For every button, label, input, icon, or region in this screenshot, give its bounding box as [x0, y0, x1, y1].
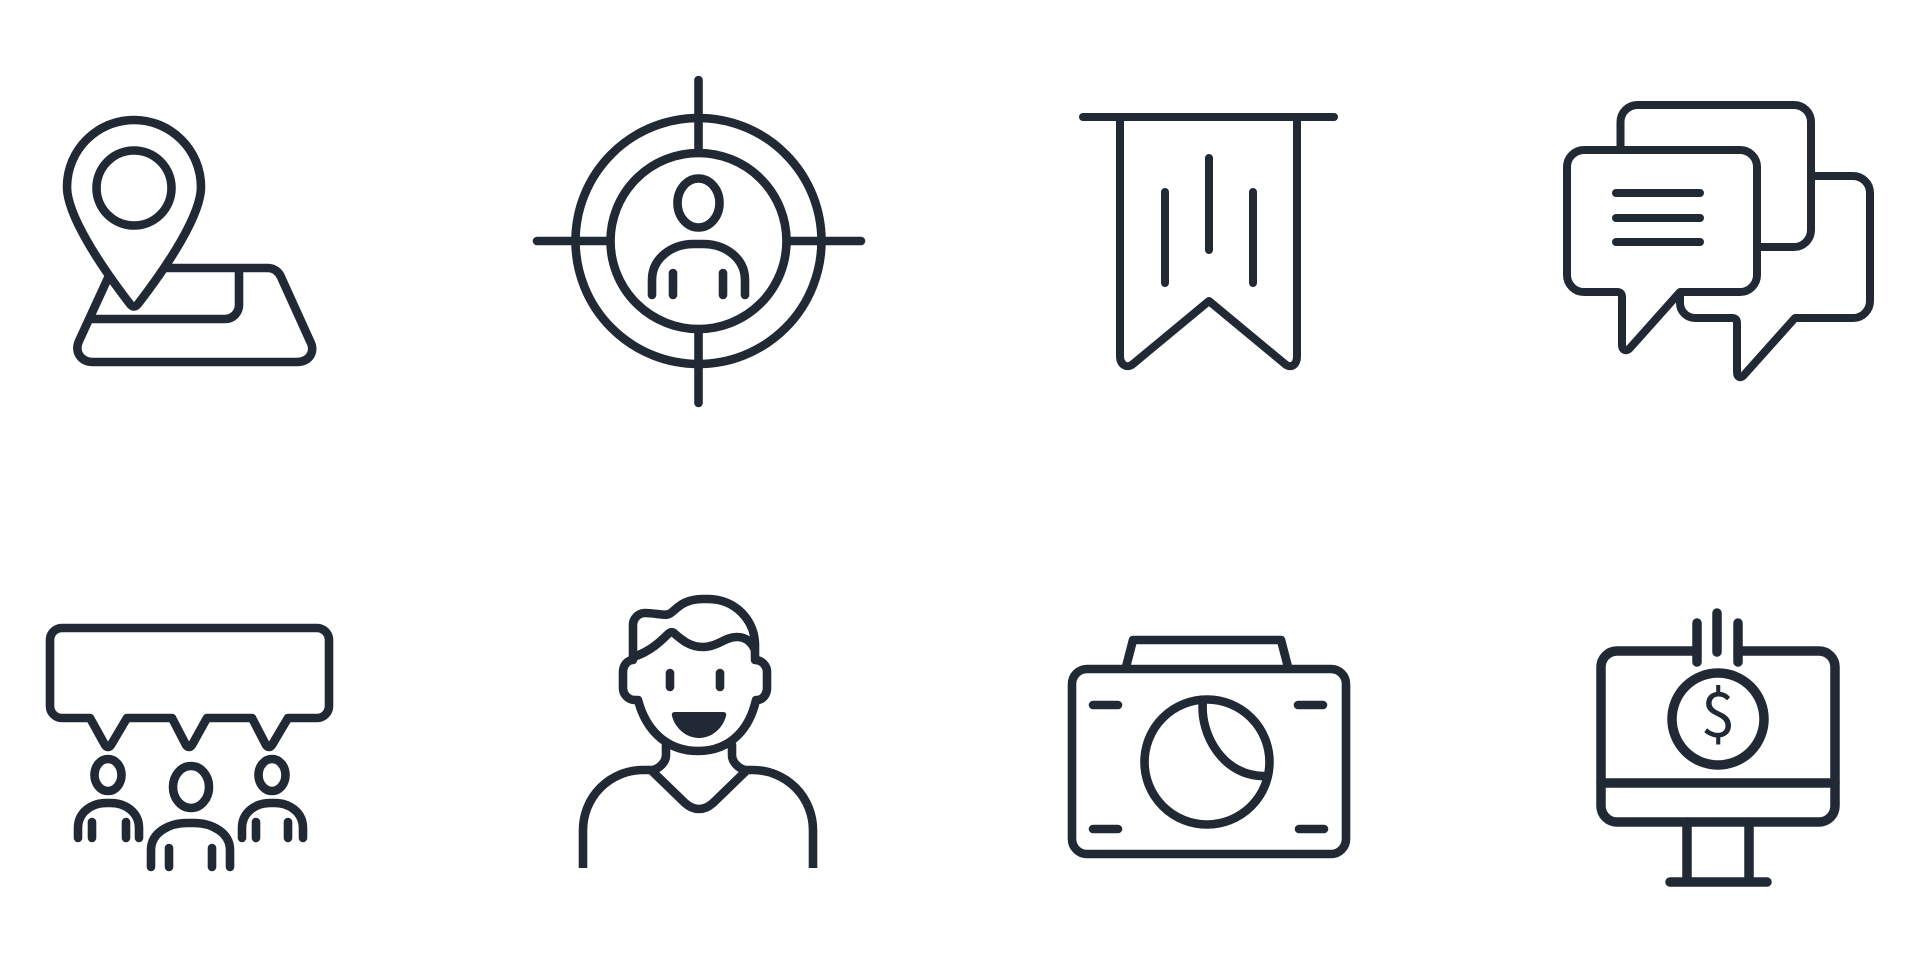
third bubble [1680, 176, 1870, 377]
folded map [77, 268, 312, 362]
banner outline [1120, 117, 1297, 366]
icon: audience with shared speech bubble [50, 628, 329, 867]
pin centre circle [96, 150, 172, 226]
eyes [670, 673, 720, 687]
right person [242, 759, 303, 838]
icon: chat bubbles [1567, 105, 1870, 377]
person head [678, 178, 720, 228]
icon: camera with pie chart lens [1072, 640, 1346, 854]
monitor frame [1601, 651, 1835, 822]
icon: smiling man portrait [583, 599, 813, 868]
pin outline [67, 120, 201, 306]
crosshair lines [537, 80, 861, 403]
camera body [1072, 669, 1346, 854]
banner rail [1083, 113, 1334, 121]
centre person [151, 766, 230, 867]
icon: map location pin [67, 120, 312, 362]
camera top [1126, 640, 1288, 667]
outer ring [576, 118, 822, 364]
hairline [633, 632, 754, 657]
back bubble [1620, 105, 1811, 247]
dollar sign: $ [1701, 665, 1735, 755]
open mouth [672, 712, 726, 738]
screen divider [1601, 778, 1835, 788]
shoulders [583, 770, 813, 868]
collar [653, 772, 745, 809]
front bubble [1567, 150, 1757, 350]
icon: target crosshair with person [537, 80, 861, 403]
neck [653, 745, 745, 770]
pie slice arc [1203, 700, 1265, 776]
speech bubble with three tails [50, 628, 329, 747]
icon: monitor with dollar coin [1601, 613, 1835, 882]
corner dashes [1093, 705, 1324, 829]
monitor stand [1670, 822, 1767, 882]
pie chart lens [1144, 700, 1270, 824]
icon: hanging banner [1083, 117, 1334, 366]
hair outline [633, 599, 755, 657]
left person [78, 759, 139, 838]
person body [652, 244, 745, 295]
inner ring [610, 153, 786, 329]
face and ears [623, 660, 767, 751]
text lines [1616, 193, 1700, 242]
coin [1672, 673, 1764, 765]
drop lines [1697, 613, 1738, 662]
banner stripes [1165, 158, 1253, 283]
